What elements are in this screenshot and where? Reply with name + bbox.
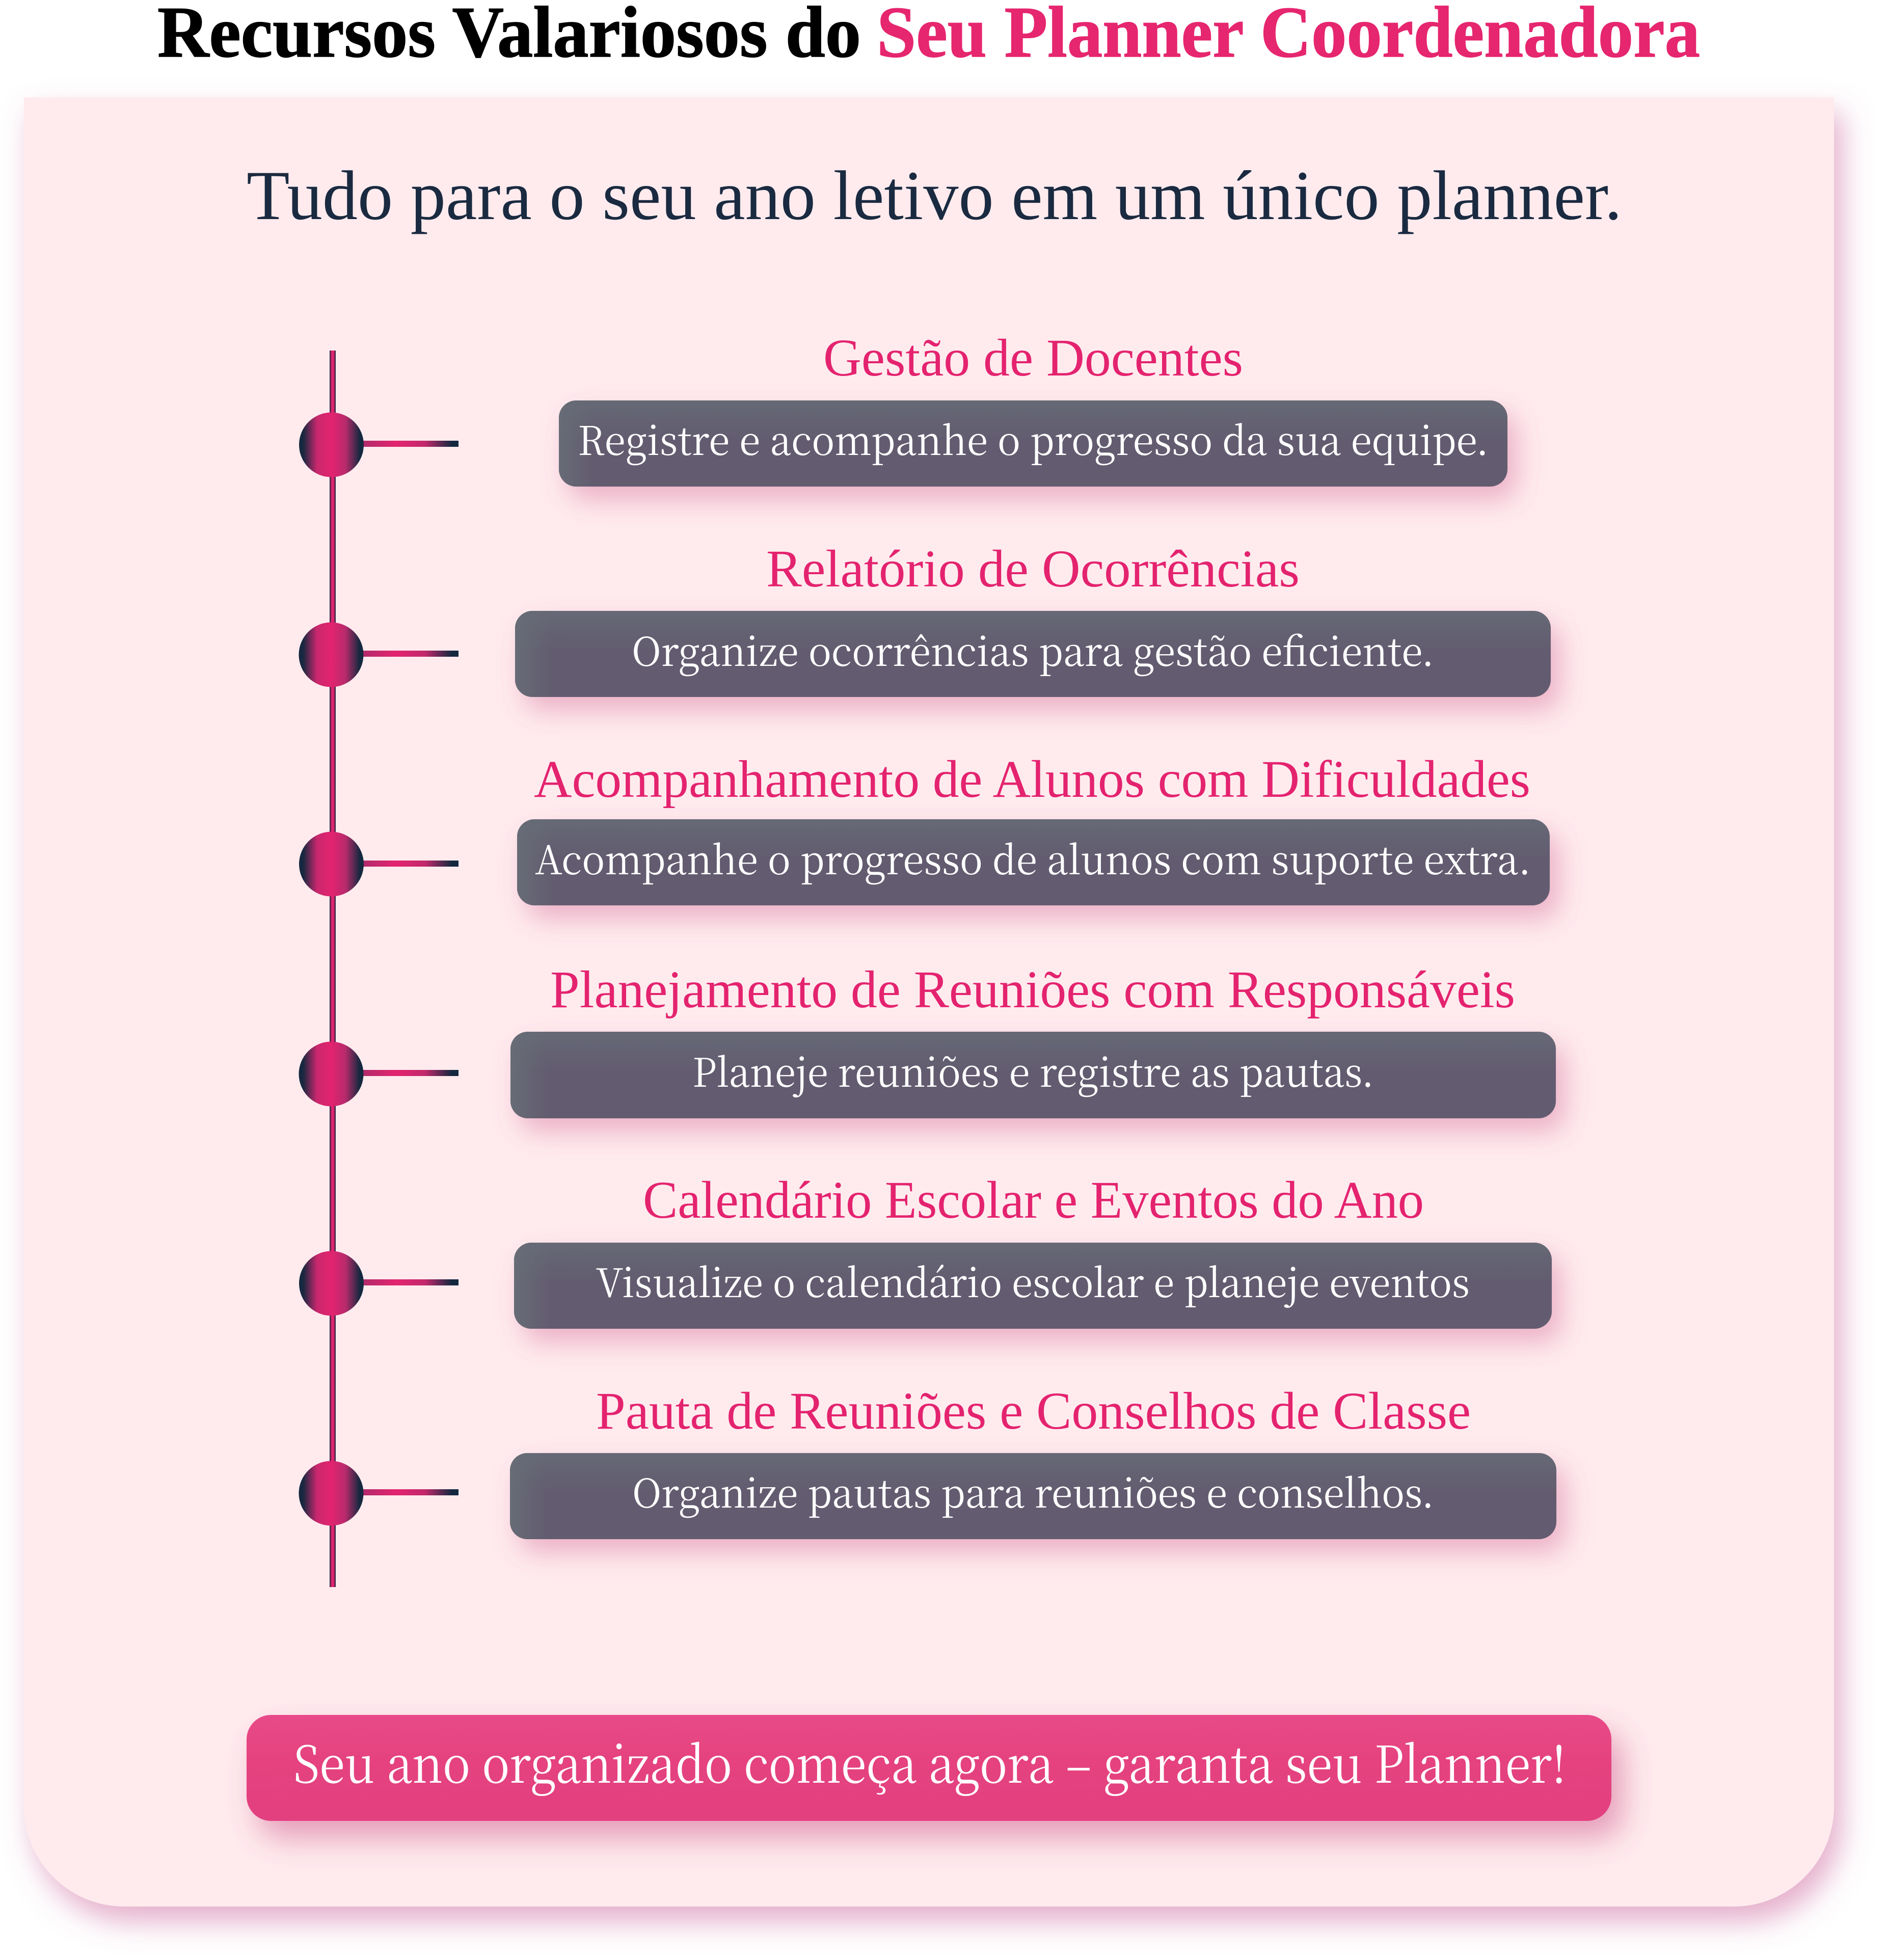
call to action text: Seu ano organizado começa agora – garanta seu Planner! — [293, 1724, 1566, 1797]
item 1 box — [559, 400, 1507, 487]
item 6 box — [510, 1453, 1556, 1539]
item 2 heading: Relatório de Ocorrências — [766, 540, 1300, 598]
item 2: Relatório de Ocorrências — [515, 540, 1551, 697]
item 4 box — [510, 1032, 1556, 1118]
item 2 text: Organize ocorrências para gestão eficiente. — [632, 621, 1434, 678]
call to action button — [247, 1715, 1611, 1821]
timeline node 6 — [299, 1461, 459, 1525]
timeline node 4 — [299, 1041, 459, 1107]
item 5 box — [514, 1243, 1552, 1329]
item 5 text: Visualize o calendário escolar e planeje eventos — [596, 1252, 1470, 1309]
item 6 heading: Pauta de Reuniões e Conselhos de Classe — [596, 1382, 1471, 1440]
item 4: Planejamento de Reuniões com Responsáveis — [510, 960, 1556, 1118]
item 3 heading: Acompanhamento de Alunos com Dificuldades — [534, 750, 1530, 809]
item 3 text: Acompanhe o progresso de alunos com suporte extra. — [535, 829, 1531, 886]
subtitle: Tudo para o seu ano letivo em um único planner. — [247, 156, 1622, 234]
item 1 heading: Gestão de Docentes — [823, 329, 1243, 387]
title — [157, 0, 1700, 72]
item 3: Acompanhamento de Alunos com Dificuldades — [517, 750, 1550, 905]
timeline — [299, 351, 459, 1587]
timeline vertical line — [330, 351, 336, 1587]
item 2 box — [515, 611, 1551, 697]
item 1 text: Registre e acompanhe o progresso da sua equipe. — [578, 410, 1489, 467]
item 1: Gestão de Docentes — [559, 329, 1507, 487]
timeline node 2 — [299, 623, 459, 687]
item 6 text: Organize pautas para reuniões e conselhos. — [632, 1462, 1434, 1519]
item 3 box — [517, 819, 1550, 905]
item 4 text: Planeje reuniões e registre as pautas. — [692, 1041, 1374, 1098]
item 5: Calendário Escolar e Eventos do Ano — [514, 1171, 1552, 1329]
timeline node 1 — [299, 413, 459, 477]
timeline node 3 — [299, 831, 459, 897]
item 5 heading: Calendário Escolar e Eventos do Ano — [643, 1171, 1424, 1229]
item 4 heading: Planejamento de Reuniões com Responsáveis — [550, 960, 1515, 1019]
item 6: Pauta de Reuniões e Conselhos de Classe — [510, 1382, 1556, 1539]
timeline node 5 — [299, 1251, 459, 1315]
